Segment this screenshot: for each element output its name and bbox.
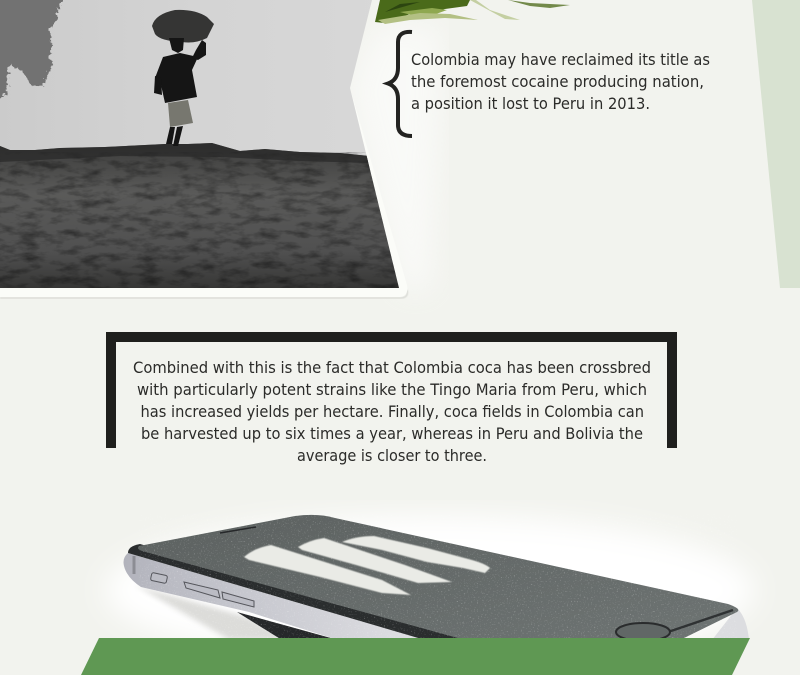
phone silver side — [124, 553, 425, 640]
photo frame shadow — [0, 290, 407, 298]
misty sky — [0, 0, 372, 156]
paragraph text: has increased yields per hectare. Finally, coca fields in Colombia can — [140, 403, 644, 421]
green banner — [81, 638, 750, 675]
ground texture — [0, 152, 400, 288]
screen corner edge — [668, 610, 733, 632]
powder lines — [244, 536, 490, 595]
speaker slot — [220, 527, 256, 533]
paragraph text: average is closer to three. — [297, 447, 487, 465]
white photo frame — [0, 20, 407, 297]
callout text: the foremost cocaine producing nation, — [411, 73, 704, 91]
sack — [152, 10, 214, 42]
curly brace — [388, 32, 412, 136]
paragraph text: be harvested up to six times a year, whereas in Peru and Bolivia the — [141, 425, 643, 443]
callout text: a position it lost to Peru in 2013. — [411, 95, 650, 113]
buttons — [150, 572, 254, 607]
shorts — [168, 100, 193, 127]
side seam — [132, 556, 136, 574]
dark back piece — [237, 612, 330, 638]
phone shadow — [141, 588, 278, 638]
paragraph text — [133, 359, 651, 465]
head — [169, 38, 184, 53]
callout text: Colombia may have reclaimed its title as — [411, 51, 710, 69]
home button — [616, 623, 670, 641]
phone glass screen — [138, 515, 738, 640]
tree foliage — [0, 0, 64, 98]
shirt — [155, 53, 198, 103]
raised arm — [192, 40, 206, 60]
hillside ground — [0, 143, 400, 288]
dust specks — [139, 515, 737, 640]
dark hill crest — [0, 143, 368, 163]
phone with powder lines — [124, 515, 749, 641]
lower arm — [154, 76, 162, 95]
dark glass edge — [128, 544, 470, 640]
right green band — [752, 0, 800, 288]
paragraph text: Combined with this is the fact that Colombia coca has been crossbred — [133, 359, 651, 377]
black frame around paragraph — [106, 332, 677, 448]
callout text — [411, 51, 710, 113]
paragraph text: with particularly potent strains like the Tingo Maria from Peru, which — [137, 381, 647, 399]
legs — [166, 127, 175, 144]
phone silver right corner — [714, 608, 749, 638]
photo: person carrying sack on a hill — [0, 0, 400, 288]
silhouette figure — [152, 10, 214, 146]
white glow behind phone — [105, 515, 755, 665]
leaves at the top — [375, 0, 570, 24]
white glow beside photo — [350, 26, 440, 290]
